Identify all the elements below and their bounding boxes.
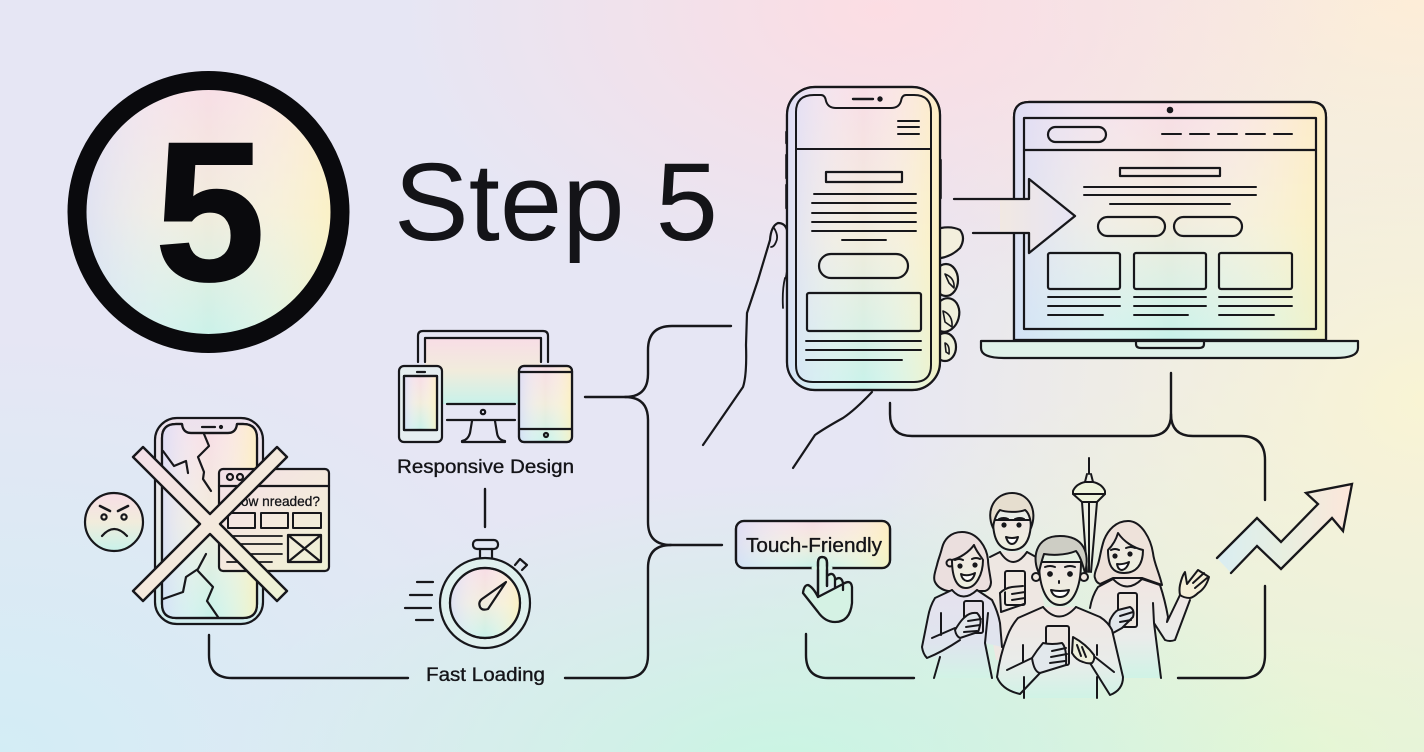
thumb (771, 228, 785, 308)
icon: responsive devices (399, 331, 572, 442)
tower (1073, 458, 1105, 572)
icon: laptop (981, 102, 1358, 358)
rear man (985, 493, 1045, 660)
browser window: How nreaded? (231, 493, 320, 509)
phone (786, 87, 940, 390)
icon: broken phone with web page and X (133, 418, 329, 624)
icon: stopwatch (405, 540, 530, 648)
large X (133, 447, 287, 601)
title: Step 5 (394, 141, 718, 264)
right fingers (929, 227, 963, 361)
icon: angry face (85, 493, 143, 551)
left woman (922, 532, 1002, 678)
number badge: 5 in circle (77, 80, 340, 344)
arrow: mobile to desktop (954, 179, 1075, 253)
label: Responsive Design: Responsive Design (397, 457, 574, 478)
front man (997, 536, 1123, 698)
label: Fast Loading: Fast Loading (426, 665, 545, 686)
number badge: 5 in circle: 5 (155, 101, 265, 322)
connector lines (209, 326, 1265, 678)
button: Touch-Friendly (736, 521, 890, 622)
icon: group of people with phones (922, 458, 1209, 698)
right woman (1090, 521, 1209, 678)
arrow: growth trend (1217, 484, 1352, 573)
icon: pointing hand (803, 557, 852, 622)
cracked phone (155, 418, 263, 624)
icon: hand holding phone (703, 87, 963, 468)
button: Touch-Friendly: Touch-Friendly (746, 535, 882, 557)
left hand (703, 223, 791, 445)
browser window (219, 469, 329, 571)
lower palm (793, 392, 872, 468)
